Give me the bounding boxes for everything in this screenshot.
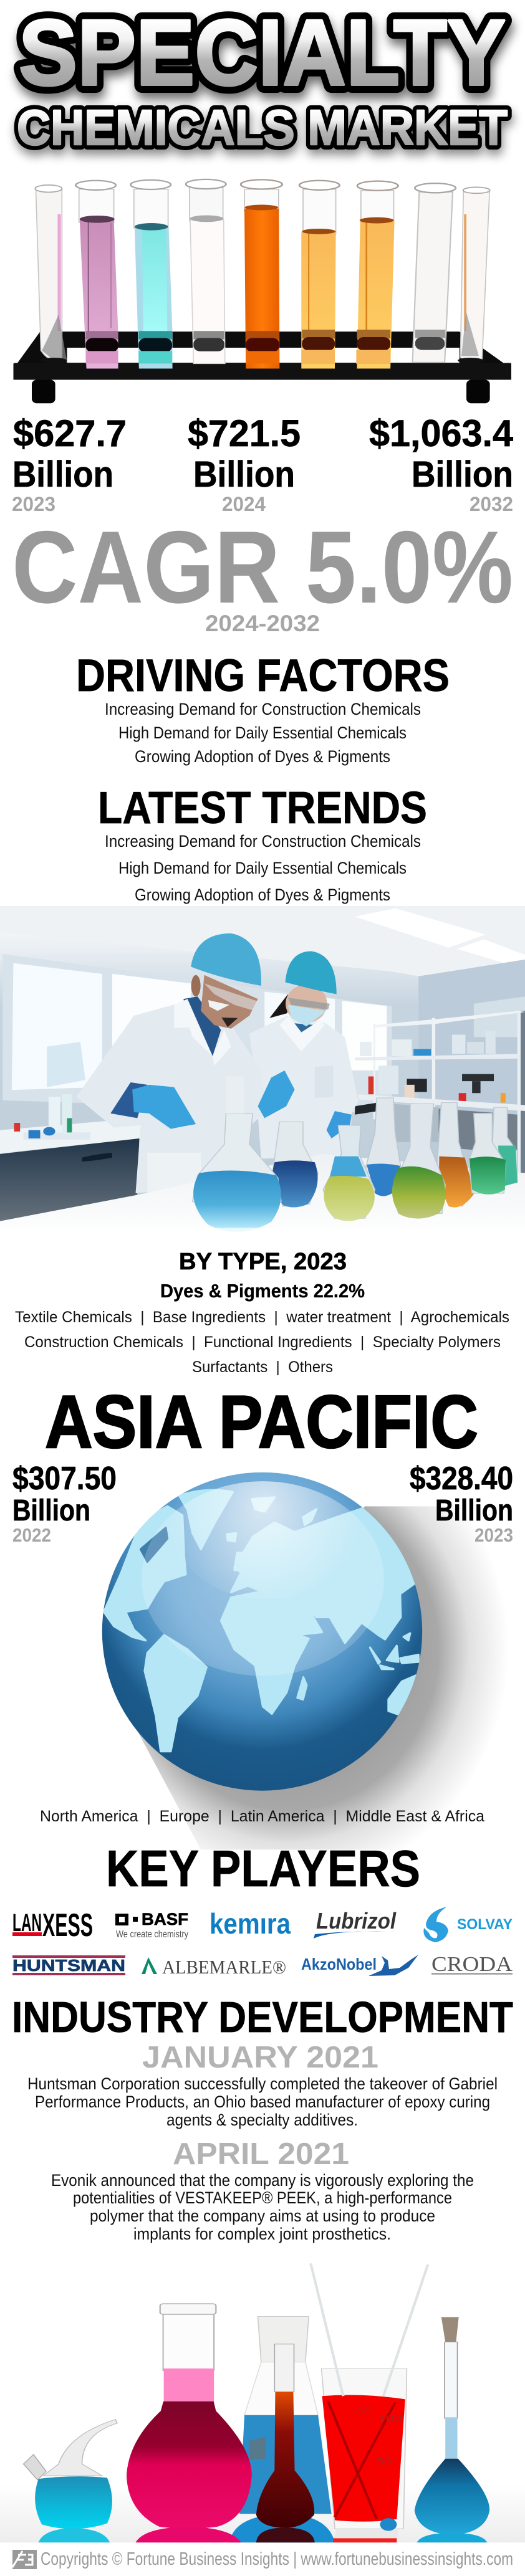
continents xyxy=(104,1490,423,1752)
red volumetric flask xyxy=(256,2344,315,2542)
regional value 2022: Billion xyxy=(12,1494,90,1527)
stat 2024: $721.5 xyxy=(188,413,301,454)
test tube 8: clear xyxy=(413,183,456,363)
test tube 1: clear xyxy=(35,185,67,361)
globe xyxy=(102,1472,498,1849)
left counter and cabinet xyxy=(0,1094,141,1221)
stat 2024: Billion xyxy=(193,454,295,495)
glassware photo illustration xyxy=(0,2263,525,2542)
teardrop flask xyxy=(415,2317,489,2542)
stat 2024: 2024 xyxy=(222,493,266,515)
logo: Lanxess: LAN xyxy=(12,1909,42,1937)
beaker with red liquid xyxy=(322,2368,407,2542)
copyright footer xyxy=(12,2549,513,2569)
big blue flask xyxy=(193,1076,281,1232)
logo: Croda: CRODA xyxy=(431,1953,513,1976)
test tube 2: pink liquid xyxy=(75,181,118,368)
globe sphere xyxy=(102,1472,422,1791)
development date: April 2021: APRIL 2021 xyxy=(173,2137,349,2171)
glass stirring rods xyxy=(311,2263,428,2396)
beaker with red liquid: 50 xyxy=(376,2456,392,2467)
yellow flask xyxy=(323,1125,375,1221)
logo: BASF xyxy=(115,1910,188,1940)
latest trends heading: LATEST TRENDS xyxy=(98,783,427,833)
key players heading: KEY PLAYERS xyxy=(106,1839,420,1897)
shelves with bottles xyxy=(355,1011,525,1173)
by type heading: BY TYPE, 2023 xyxy=(179,1249,347,1275)
regional value 2022 xyxy=(12,1461,117,1546)
regional value 2022: 2022 xyxy=(12,1524,51,1546)
logo: BASF: BASF xyxy=(142,1910,188,1929)
beaker with red liquid: 100 xyxy=(378,2413,402,2424)
title xyxy=(17,0,509,161)
logo: Lanxess xyxy=(12,1907,93,1944)
teal flask xyxy=(24,2420,117,2542)
rear blue flask xyxy=(365,1098,402,1196)
company logos xyxy=(12,1907,513,1978)
green yellow flask xyxy=(392,1104,445,1219)
development text: April 2021: polymer that the company aims at using to produce xyxy=(90,2206,435,2225)
title line: SPECIALTY: SPECIALTY xyxy=(21,7,508,112)
development text: April 2021: potentialities of VESTAKEEP® PEEK, a high-performance xyxy=(73,2188,452,2207)
development text: April 2021 xyxy=(51,2171,474,2243)
regional value 2022: $307.50 xyxy=(12,1461,117,1497)
blue erlenmeyer flask xyxy=(229,2317,335,2542)
test tube 9: clear xyxy=(460,187,490,361)
laboratory scientists photo illustration xyxy=(0,906,525,1243)
development date: January 2021: JANUARY 2021 xyxy=(142,2041,378,2074)
logo: AkzoNobel: AkzoNobel xyxy=(301,1955,377,1973)
segment list: Textile Chemicals | Base Ingredients | water treatment | Agrochemicals xyxy=(15,1309,509,1326)
pink flask xyxy=(127,2304,252,2542)
test tube 6: amber liquid xyxy=(299,181,340,368)
green flask rear xyxy=(492,1107,518,1186)
CAGR headline: 2024-2032 xyxy=(205,611,320,636)
latest trends list xyxy=(105,832,421,904)
logo: Solvay: SOLVAY xyxy=(457,1916,513,1933)
logo: Kemira: kemıra xyxy=(210,1907,291,1940)
green flask front xyxy=(469,1114,506,1195)
leading segment: Dyes & Pigments 22.2% xyxy=(160,1280,365,1302)
dark blue flask xyxy=(272,1122,318,1208)
test tube 4: clear liquid xyxy=(186,179,226,363)
stat 2023: 2023 xyxy=(12,493,55,515)
test tube 3: teal liquid xyxy=(130,180,173,368)
title line: SPECIALTY: SPECIALTY xyxy=(19,0,506,105)
regional value 2023 xyxy=(410,1461,513,1546)
logo: Lubrizol: Lubrizol xyxy=(316,1908,397,1934)
segment list: Surfactants | Others xyxy=(192,1358,333,1376)
segment list: Construction Chemicals | Functional Ingredients | Specialty Polymers xyxy=(24,1333,501,1351)
driving factors list: Growing Adoption of Dyes & Pigments xyxy=(135,747,390,766)
logo: Lanxess: XESS xyxy=(42,1907,93,1944)
test tube 5: orange liquid xyxy=(241,179,282,368)
orange flask xyxy=(435,1103,474,1208)
development text: April 2021: implants for complex joint prosthetics. xyxy=(133,2225,391,2243)
latest trends list: Increasing Demand for Construction Chemicals xyxy=(105,832,421,851)
footer logo xyxy=(12,2550,37,2569)
asia pacific heading: ASIA PACIFIC xyxy=(45,1380,478,1464)
title line: CHEMICALS MARKET: CHEMICALS MARKET xyxy=(17,100,508,155)
photo fade edges xyxy=(0,1228,525,1242)
stat 2023: $627.7 xyxy=(13,413,127,454)
stat 2032 xyxy=(369,413,514,515)
driving factors list: High Demand for Daily Essential Chemicals xyxy=(118,723,407,742)
latest trends list: Growing Adoption of Dyes & Pigments xyxy=(135,885,390,904)
stat 2032: $1,063.4 xyxy=(369,413,514,454)
driving factors heading: DRIVING FACTORS xyxy=(76,651,450,701)
logo: Albemarle: ALBEMARLE® xyxy=(162,1956,286,1978)
test tube 7: amber liquid xyxy=(356,181,398,368)
development text: January 2021: agents & specialty additives. xyxy=(166,2111,358,2129)
stat 2024 xyxy=(188,413,301,515)
other regions: North America | Europe | Latin America | Middle East & Africa xyxy=(40,1808,484,1825)
scientist: man xyxy=(76,933,295,1193)
segment list xyxy=(15,1309,509,1376)
lab table xyxy=(0,1154,525,1240)
title line: CHEMICALS MARKET: CHEMICALS MARKET xyxy=(17,100,508,155)
beaker with red liquid: CC xyxy=(354,2407,373,2416)
driving factors list xyxy=(105,700,421,766)
development text: January 2021 xyxy=(27,2074,498,2129)
logo: Huntsman: HUNTSMAN xyxy=(12,1956,125,1975)
regional value 2023: 2023 xyxy=(474,1524,513,1546)
globe gloss highlight xyxy=(142,1481,384,1676)
title line: SPECIALTY: SPECIALTY xyxy=(19,0,506,105)
development text: April 2021: Evonik announced that the company is vigorously exploring the xyxy=(51,2171,474,2190)
latest trends list: High Demand for Daily Essential Chemicals xyxy=(118,859,407,877)
market value stats xyxy=(12,413,514,515)
windows xyxy=(2,954,392,1114)
scientist: woman xyxy=(249,952,359,1158)
colored flasks xyxy=(193,1076,518,1232)
logo: Solvay xyxy=(423,1907,513,1942)
stat 2023 xyxy=(12,413,127,515)
stat 2023: Billion xyxy=(12,454,113,495)
regional value 2023: $328.40 xyxy=(410,1461,513,1497)
test tube rack illustration xyxy=(13,179,511,403)
logo: BASF: We create chemistry xyxy=(116,1929,188,1940)
logo: AkzoNobel xyxy=(301,1955,418,1976)
driving factors list: Increasing Demand for Construction Chemicals xyxy=(105,700,421,718)
stat 2032: 2032 xyxy=(470,493,513,515)
regional value 2023: Billion xyxy=(435,1494,513,1527)
stat 2032: Billion xyxy=(412,454,513,495)
globe shadow xyxy=(134,1506,525,1849)
